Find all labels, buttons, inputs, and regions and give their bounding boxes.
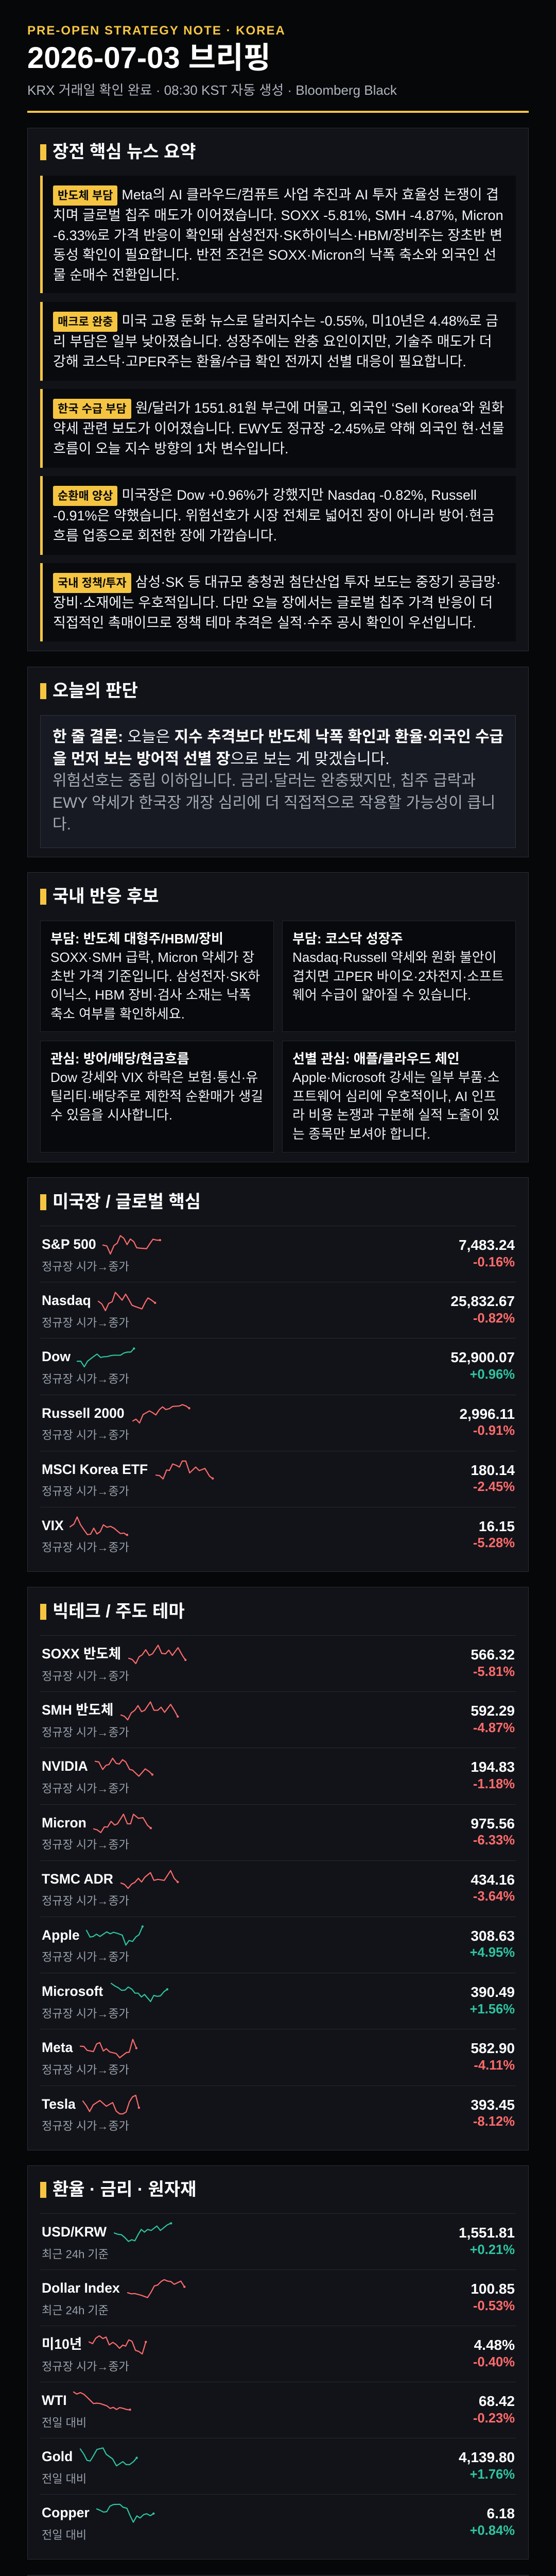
row: SMH: 정규장 시가→종가 [42, 1726, 129, 1739]
row: TSMC ADR [40, 1860, 516, 1917]
news item: semiconductors: 동성 확인이 필요합니다. 반전 조건은 SOXX·Micron의 낙폭 축소와 외국인 선 [53, 247, 496, 263]
row: Copper: 전일 대비 [42, 2529, 86, 2541]
news item: rotation: 미국장은 Dow +0.96%가 강했지만 Nasdaq -0.82%, Russell [121, 487, 477, 503]
row: US 10Y: 4.48% [474, 2337, 515, 2353]
row: TSMC ADR: 정규장 시가→종가 [42, 1894, 129, 1907]
row: Tesla [40, 2086, 516, 2142]
row: SOXX [40, 1635, 516, 1691]
news item: domestic policy: 장비·소재에는 우호적입니다. 다만 오늘 장에서는 글로벌 칩주 가격 반응이 더 [53, 595, 493, 611]
panel: risks / intraday checks [27, 2575, 529, 2576]
row: USD/KRW [40, 2213, 516, 2269]
row: S&P 500 [40, 1226, 516, 1282]
row: Gold [40, 2438, 516, 2494]
row: Microsoft: 정규장 시가→종가 [42, 2007, 129, 2020]
row: Micron: -6.33% [473, 1833, 515, 1848]
news item: domestic policy: 삼성·SK 등 대규모 충청권 첨단산업 투자 보도는 중장기 공급망· [135, 574, 501, 590]
row: Tesla: Tesla [42, 2096, 76, 2111]
row: NVIDIA: NVIDIA [42, 1758, 88, 1774]
row: Dollar Index: 100.85 [471, 2281, 515, 2297]
row: VIX: -5.28% [473, 1536, 515, 1550]
row: MSCI Korea ETF: MSCI Korea ETF [42, 1462, 148, 1477]
heading: 환율 · 금리 · 원자재 [53, 2180, 196, 2199]
row: Dow: Dow [42, 1349, 71, 1364]
row: Apple: 308.63 [471, 1928, 515, 1944]
row: WTI [40, 2382, 516, 2438]
row: US 10Y [40, 2326, 516, 2382]
row: SMH: 592.29 [471, 1703, 515, 1719]
news item: macro: 리 부담은 일부 낮아졌습니다. 성장주에는 완충 요인이지만, 기술주 매도가 더 [53, 334, 492, 349]
card: semiconductors burden: SOXX·SMH 급락, Micron 약세가 장 [50, 950, 254, 965]
row: Meta: -4.11% [474, 2058, 515, 2073]
row: Nasdaq: Nasdaq [42, 1293, 91, 1308]
row: SMH: -4.87% [473, 1721, 515, 1735]
card: kosdaq growth burden: 부담: 코스닥 성장주 [292, 931, 403, 946]
news item: rotation: 흐름 업종으로 회전한 장에 가깝습니다. [53, 528, 277, 543]
row: Meta: 정규장 시가→종가 [42, 2063, 129, 2076]
card: kosdaq growth burden: Nasdaq·Russell 약세와 원화 불안이 [292, 950, 497, 965]
row: Dow: +0.96% [470, 1367, 515, 1382]
row: Gold: Gold [42, 2449, 73, 2464]
row: NVIDIA: 정규장 시가→종가 [42, 1782, 129, 1795]
row: MSCI Korea ETF [40, 1451, 516, 1507]
row: VIX: 정규장 시가→종가 [42, 1541, 129, 1554]
row: WTI: 전일 대비 [42, 2416, 86, 2429]
row: Microsoft: Microsoft [42, 1984, 103, 1999]
row: MSCI Korea ETF: 정규장 시가→종가 [42, 1485, 129, 1498]
row: Meta [40, 2029, 516, 2086]
news item: rotation: 순환매 양상 [58, 489, 113, 502]
row: SMH [40, 1691, 516, 1748]
news item: domestic policy: 국내 정책/투자 [58, 577, 127, 589]
row: TSMC ADR: -3.64% [473, 1889, 515, 1904]
news item: korea flows: 한국 수급 부담 [58, 402, 127, 415]
card: selective interest: 프트웨어 심리에 우호적이나, AI 인프 [292, 1089, 496, 1104]
subtitle: KRX 거래일 확인 완료 · 08:30 KST 자동 생성 · Bloomberg Black [27, 82, 397, 98]
header rule [27, 111, 529, 113]
card: selective interest: 는 종목만 보셔야 합니다. [292, 1126, 430, 1142]
eyebrow: PRE-OPEN STRATEGY NOTE · KOREA [27, 24, 286, 38]
row: VIX: VIX [42, 1518, 64, 1533]
row: VIX [40, 1507, 516, 1563]
row: Nasdaq: 정규장 시가→종가 [42, 1316, 129, 1329]
row: Micron: 975.56 [471, 1816, 515, 1832]
row: Apple: Apple [42, 1927, 80, 1943]
row: Microsoft [40, 1973, 516, 2029]
row: Apple [40, 1917, 516, 1973]
row: NVIDIA: 194.83 [471, 1759, 515, 1775]
card: defensive interest: Dow 강세와 VIX 하락은 보험·통신·유 [50, 1070, 258, 1085]
row: Micron: Micron [42, 1815, 86, 1831]
news item: korea flows: 약세 관련 보도가 이어졌습니다. EWY도 정규장 -2.45%로 약해 외국인 현·선물 [53, 421, 505, 436]
row: Micron: 정규장 시가→종가 [42, 1838, 129, 1851]
panel: FX / rates / commodities [27, 2165, 529, 2560]
row: Apple: 정규장 시가→종가 [42, 1951, 129, 1963]
row: Microsoft: +1.56% [470, 2002, 515, 2016]
callout: one-line conclusion: 을 먼저 보는 방어적 선별 장으로 보는 게 맞겠습니다. [53, 750, 390, 768]
card: defensive interest: 수 있음을 시사합니다. [50, 1107, 172, 1123]
title: 2026-07-03 브리핑 [27, 41, 271, 74]
row: Russell 2000: 2,996.11 [460, 1406, 515, 1422]
card: semiconductors burden: 이닉스, HBM 장비·검사 소재는 낙폭 [50, 987, 251, 1003]
row: Dow [40, 1338, 516, 1395]
panel: domestic reaction candidates [27, 872, 529, 1162]
row: S&P 500: 7,483.24 [459, 1237, 515, 1253]
card: selective interest [282, 1041, 516, 1153]
row: USD/KRW: 1,551.81 [459, 2225, 515, 2241]
news item: domestic policy [40, 563, 516, 641]
news item: macro [40, 302, 516, 380]
row: WTI: WTI [42, 2393, 67, 2408]
row: Dollar Index: -0.53% [473, 2299, 515, 2313]
row: Apple: +4.95% [470, 1945, 515, 1960]
card: defensive interest: 틸리티·배당주로 제한적 순환매가 생길 [50, 1089, 263, 1104]
card: kosdaq growth burden: 웨어 수급이 얇아질 수 있습니다. [292, 987, 471, 1003]
row: SOXX: 566.32 [471, 1647, 515, 1663]
row: USD/KRW: USD/KRW [42, 2224, 107, 2240]
row: Dollar Index: 최근 24h 기준 [42, 2304, 109, 2316]
callout: one-line conclusion [40, 715, 516, 848]
news item: semiconductors [40, 176, 516, 293]
news item: korea flows: 흐름이 오늘 지수 방향의 1차 변수입니다. [53, 441, 288, 456]
news item: korea flows: 원/달러가 1551.81원 부근에 머물고, 외국인 ‘Sell Korea’와 원화 [135, 400, 504, 416]
card: selective interest: 라 비용 논쟁과 구분해 실적 노출이 있 [292, 1107, 499, 1123]
news item: semiconductors: -6.33%로 가격 반응이 확인돼 삼성전자·SK하이닉스·HBM/장비주는 장초반 변 [53, 228, 502, 243]
row: Micron [40, 1804, 516, 1860]
news item: rotation [40, 476, 516, 555]
row: Dollar Index [40, 2269, 516, 2326]
row: SOXX: 정규장 시가→종가 [42, 1669, 129, 1683]
card: defensive interest: 관심: 방어/배당/현금흐름 [50, 1051, 189, 1066]
row: Nasdaq: -0.82% [473, 1311, 515, 1326]
market list [40, 1226, 516, 1554]
panel: news summary [27, 128, 529, 651]
row: SMH: SMH 반도체 [42, 1702, 113, 1718]
row: Russell 2000: Russell 2000 [42, 1405, 125, 1421]
row: Gold: +1.76% [470, 2467, 515, 2481]
callout: one-line conclusion: 위험선호는 중립 이하입니다. 금리·달러는 완충됐지만, 칩주 급락과 [53, 772, 476, 789]
news item: rotation: -0.91%은 약했습니다. 위험선호가 시장 전체로 넓어진 장이 아니라 방어·현금 [53, 508, 495, 523]
row: USD/KRW: 최근 24h 기준 [42, 2247, 109, 2261]
row: Nasdaq [40, 1282, 516, 1338]
news item: domestic policy: 직접적인 촉매이므로 정책 테마 추격은 실적·수주 공시 확인이 우선입니다. [53, 615, 476, 631]
row: Copper: Copper [42, 2505, 90, 2520]
row: Dollar Index: Dollar Index [42, 2280, 120, 2296]
row: Nasdaq: 25,832.67 [450, 1293, 515, 1309]
news item: macro: 미국 고용 둔화 뉴스로 달러지수는 -0.55%, 미10년은 4.48%로 금 [121, 313, 498, 329]
row: SOXX: -5.81% [473, 1664, 515, 1679]
card: defensive interest [40, 1041, 274, 1153]
row: SOXX: SOXX 반도체 [42, 1646, 121, 1662]
row: WTI: 68.42 [479, 2393, 515, 2409]
row: Dow: 52,900.07 [450, 1349, 515, 1365]
row: USD/KRW: +0.21% [470, 2242, 515, 2257]
row: Meta: Meta [42, 2040, 73, 2055]
row: US 10Y: -0.40% [473, 2354, 515, 2369]
row: S&P 500: -0.16% [473, 1255, 515, 1269]
callout: one-line conclusion: 한 줄 결론: 오늘은 지수 추격보다 반도체 낙폭 확인과 환율·외국인 수급 [53, 728, 503, 745]
market list [40, 2213, 516, 2541]
row: Gold: 전일 대비 [42, 2472, 86, 2485]
row: Russell 2000: -0.91% [473, 1423, 515, 1438]
news item: macro: 매크로 완충 [58, 315, 113, 328]
card: semiconductors burden: 초반 가격 기준입니다. 삼성전자·SK하 [50, 969, 260, 984]
row: VIX: 16.15 [479, 1518, 515, 1534]
row: MSCI Korea ETF: -2.45% [473, 1480, 515, 1494]
card: kosdaq growth burden: 겹치면 고PER 바이오·2차전지·소프트 [292, 969, 504, 984]
row: NVIDIA [40, 1748, 516, 1804]
row: S&P 500: S&P 500 [42, 1236, 96, 1252]
row: TSMC ADR: 434.16 [471, 1872, 515, 1888]
row: Copper: +0.84% [470, 2523, 515, 2538]
news item: semiconductors: 물 순매수 전환입니다. [53, 267, 180, 282]
row: Gold: 4,139.80 [459, 2449, 515, 2465]
row: Meta: 582.90 [471, 2040, 515, 2056]
row: Tesla: -8.12% [473, 2114, 515, 2129]
market list [40, 1635, 516, 2132]
panel: big tech / leading themes [27, 1587, 529, 2150]
heading: 국내 반응 후보 [53, 887, 159, 906]
card: kosdaq growth burden [282, 921, 516, 1032]
news item: semiconductors: Meta의 AI 클라우드/컴퓨트 사업 추진과 AI 투자 효율성 논쟁이 겹 [121, 187, 499, 202]
row: Tesla: 정규장 시가→종가 [42, 2120, 129, 2132]
card: semiconductors burden: 축소 여부를 확인하세요. [50, 1006, 185, 1022]
row: Tesla: 393.45 [471, 2097, 515, 2112]
news item: macro: 강해 코스닥·고PER주는 환율/수급 확인 전까지 선별 대응이 필요합니다. [53, 353, 466, 369]
heading: 빅테크 / 주도 테마 [53, 1602, 185, 1621]
heading: 오늘의 판단 [53, 681, 138, 701]
row: Russell 2000: 정규장 시가→종가 [42, 1429, 129, 1442]
row: Dow: 정규장 시가→종가 [42, 1372, 129, 1385]
card: selective interest: 선별 관심: 애플/클라우드 체인 [292, 1051, 460, 1066]
heading: 장전 핵심 뉴스 요약 [53, 142, 196, 162]
row: US 10Y: 미10년 [42, 2336, 82, 2352]
row: S&P 500: 정규장 시가→종가 [42, 1260, 129, 1273]
row: MSCI Korea ETF: 180.14 [471, 1462, 515, 1478]
card: semiconductors burden [40, 921, 274, 1032]
row: Microsoft: 390.49 [471, 1984, 515, 2000]
card: semiconductors burden: 부담: 반도체 대형주/HBM/장비 [50, 931, 223, 946]
row: WTI: -0.23% [473, 2411, 515, 2426]
row: Russell 2000 [40, 1395, 516, 1451]
news item: korea flows [40, 389, 516, 468]
row: NVIDIA: -1.18% [473, 1777, 515, 1791]
callout: one-line conclusion: 다. [53, 816, 71, 833]
callout: one-line conclusion: EWY 약세가 한국장 개장 심리에 더 직접적으로 작용할 가능성이 큽니 [53, 794, 495, 811]
row: Copper: 6.18 [487, 2505, 515, 2521]
news item: semiconductors: 반도체 부담 [58, 189, 113, 202]
panel: today's judgement [27, 667, 529, 857]
news item: semiconductors: 치며 글로벌 칩주 매도가 이어졌습니다. SOXX -5.81%, SMH -4.87%, Micron [53, 208, 503, 223]
row: TSMC ADR: TSMC ADR [42, 1871, 113, 1887]
row: Copper [40, 2494, 516, 2550]
row: US 10Y: 정규장 시가→종가 [42, 2360, 129, 2373]
panel: US / global core [27, 1177, 529, 1572]
heading: 미국장 / 글로벌 핵심 [53, 1192, 201, 1212]
card: selective interest: Apple·Microsoft 강세는 일부 부품·소 [292, 1070, 499, 1085]
